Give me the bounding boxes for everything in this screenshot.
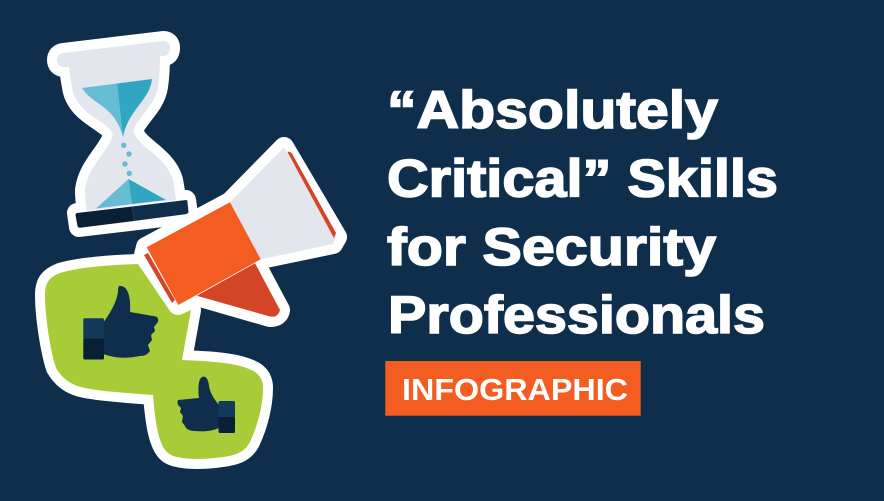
title <box>387 81 778 345</box>
hourglass lower sand <box>96 179 166 208</box>
megaphone cone <box>230 147 336 259</box>
icon: hourglass <box>57 41 188 228</box>
title: “Absolutely <box>387 81 719 140</box>
megaphone body <box>147 202 261 305</box>
icon: green thumbs-up badge <box>45 264 263 459</box>
megaphone rim <box>287 152 336 238</box>
icon: large thumbs up <box>83 286 158 360</box>
title: Professionals <box>388 286 765 345</box>
title: for Security <box>387 218 717 277</box>
megaphone back strip <box>144 253 175 303</box>
icon: small thumbs up <box>178 377 235 433</box>
megaphone handle <box>197 263 280 317</box>
icon: megaphone <box>144 147 337 317</box>
title: Critical” Skills <box>387 150 778 208</box>
tag: infographic: INFOGRAPHIC <box>402 373 628 407</box>
tag: infographic <box>385 361 641 416</box>
hourglass base <box>76 200 188 228</box>
hourglass falling sand <box>121 143 132 176</box>
hourglass upper sand <box>82 79 152 137</box>
